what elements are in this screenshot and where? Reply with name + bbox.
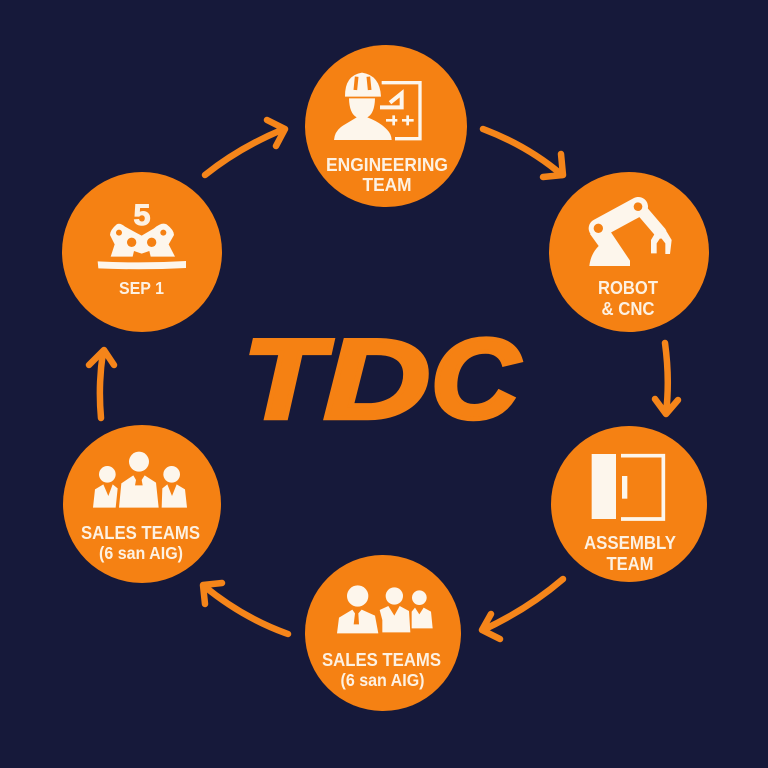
icon: engineer with drawing board — [334, 73, 420, 140]
label: assembly team: TEAM — [606, 554, 654, 574]
label: sales teams left — [81, 523, 200, 563]
title: TDC — [243, 316, 520, 442]
label: assembly team — [584, 533, 676, 574]
label: robot and CNC: ROBOT — [598, 278, 658, 298]
panel: step 1 — [62, 172, 222, 332]
title: TDC: T — [243, 316, 332, 442]
label: robot and CNC: & CNC — [602, 299, 654, 319]
label: engineering team: TEAM — [362, 175, 412, 195]
label: assembly team: ASSEMBLY — [584, 533, 676, 553]
arrow: engineering to robot — [483, 129, 563, 177]
arrow: bottom sales to left sales — [203, 583, 288, 634]
panel: sales teams bottom — [305, 555, 461, 711]
icon: robots on platform — [98, 224, 186, 269]
label: sales teams bottom: (6 san AIG) — [340, 670, 424, 690]
label: step 1: SEP 1 — [119, 278, 164, 298]
panel: robot and CNC — [549, 172, 709, 332]
arrow: left sales to step 1 — [89, 350, 114, 418]
label: sales teams bottom: SALES TEAMS — [322, 650, 441, 670]
icon: three people — [337, 585, 433, 633]
title: TDC: D — [324, 316, 430, 442]
number: 5: 5 — [134, 199, 150, 232]
title: TDC: C — [431, 316, 520, 442]
arrow: assembly to bottom sales — [482, 579, 563, 639]
label: engineering team: ENGINEERING — [326, 155, 448, 175]
icon: three people — [93, 452, 187, 508]
label: engineering team — [326, 155, 448, 195]
icon: robot arm — [589, 202, 672, 266]
icon: door — [592, 454, 663, 519]
panel: engineering team — [305, 45, 467, 207]
label: sales teams left: SALES TEAMS — [81, 523, 200, 543]
arrow: step 1 to engineering — [205, 120, 285, 175]
panel: sales teams left — [63, 425, 221, 583]
label: robot and CNC — [598, 278, 658, 319]
panel: assembly team — [551, 426, 707, 582]
label: sales teams bottom — [322, 650, 441, 690]
label: sales teams left: (6 san AIG) — [99, 543, 183, 563]
arrow: robot to assembly — [655, 343, 678, 414]
